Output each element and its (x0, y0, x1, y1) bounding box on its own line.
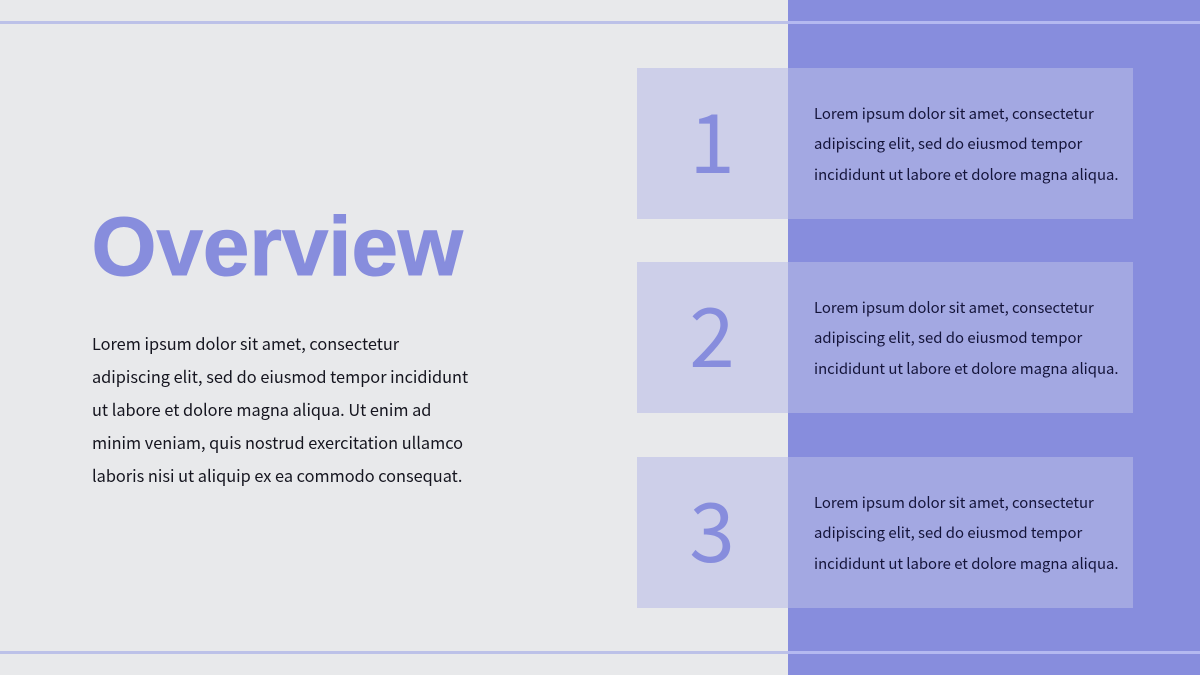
number 3: 3 (689, 467, 735, 586)
number 1: 1 (689, 78, 735, 197)
text: item 1 description: Lorem ipsum dolor sit amet, consectetur (814, 103, 1094, 124)
text: item 2 description: incididunt ut labore et dolore magna aliqua. (814, 358, 1118, 379)
panel: item 3 (637, 457, 1133, 608)
bottom rule left (0, 651, 788, 654)
number 2: 2 (689, 272, 735, 391)
text block: intro paragraph: Lorem ipsum dolor sit amet, consectetur (92, 331, 399, 355)
text: item 1 description: incididunt ut labore et dolore magna aliqua. (814, 164, 1118, 185)
title: Overview (92, 199, 463, 293)
text: item 2 description: Lorem ipsum dolor sit amet, consectetur (814, 297, 1094, 318)
top rule right (788, 21, 1200, 24)
text: item 3 description: incididunt ut labore et dolore magna aliqua. (814, 553, 1118, 574)
number box 1 (637, 68, 788, 219)
text: item 3 description: adipiscing elit, sed do eiusmod tempor (814, 522, 1082, 543)
text: item 1 description (814, 103, 1118, 185)
text block: intro paragraph: adipiscing elit, sed do eiusmod tempor incididunt (92, 364, 468, 388)
text box 2 (788, 262, 1132, 413)
text block: intro paragraph: ut labore et dolore magna aliqua. Ut enim ad (92, 397, 431, 421)
text block: intro paragraph (92, 331, 468, 487)
text: item 1 description: adipiscing elit, sed do eiusmod tempor (814, 133, 1082, 154)
number box 3 (637, 457, 788, 608)
bottom rule right (788, 651, 1200, 654)
top rule left (0, 21, 788, 24)
text: item 2 description: adipiscing elit, sed do eiusmod tempor (814, 327, 1082, 348)
panel: item 1 (637, 68, 1133, 219)
text: item 3 description (814, 492, 1118, 574)
text block: intro paragraph: laboris nisi ut aliquip ex ea commodo consequat. (92, 463, 462, 487)
panel: item 2 (637, 262, 1133, 413)
number box 2 (637, 262, 788, 413)
text block: intro paragraph: minim veniam, quis nostrud exercitation ullamco (92, 430, 463, 454)
text: item 2 description (814, 297, 1118, 379)
text box 3 (788, 457, 1132, 608)
panel: right purple band (788, 0, 1200, 675)
text: item 3 description: Lorem ipsum dolor sit amet, consectetur (814, 492, 1094, 513)
text box 1 (788, 68, 1132, 219)
